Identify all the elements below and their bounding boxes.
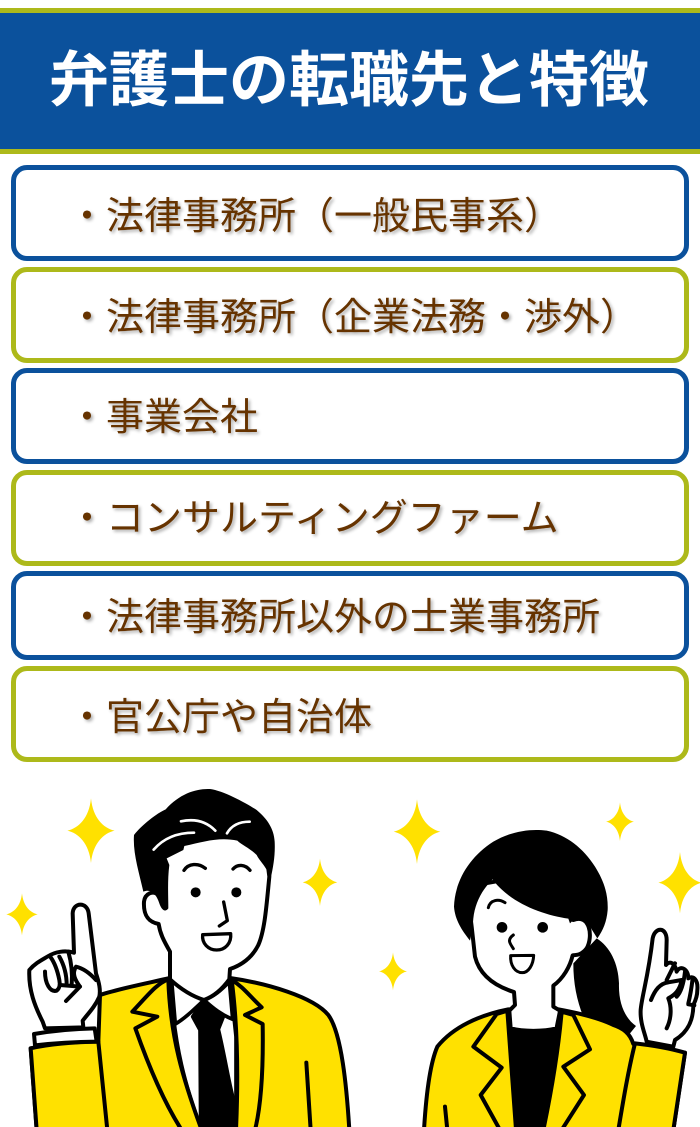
- woman ponytail: [573, 938, 636, 1033]
- man lapels: [132, 979, 263, 1127]
- man pointing hand: [29, 905, 100, 1028]
- title banner: [0, 8, 700, 154]
- woman with sparkles: [379, 799, 700, 1127]
- man head: [144, 830, 269, 1000]
- list item 2: [11, 267, 689, 363]
- man hair highlights: [154, 820, 250, 850]
- woman inner top: [510, 1027, 562, 1127]
- list item 3: [11, 368, 689, 464]
- title: 弁護士の転職先と特徴: [49, 47, 649, 114]
- man face: [184, 865, 250, 950]
- sparkles right: [379, 799, 700, 990]
- list item 2: ・法律事務所（企業法務・渉外）: [68, 297, 638, 339]
- list item 6: [11, 666, 689, 762]
- woman head and neck: [467, 870, 590, 1031]
- list item 5: ・法律事務所以外の士業事務所: [68, 596, 600, 638]
- list item 6: ・官公庁や自治体: [68, 697, 372, 739]
- list item 1: [11, 165, 689, 261]
- list item 4: [11, 470, 689, 566]
- woman lapels: [473, 1011, 590, 1127]
- list item 4: ・コンサルティングファーム: [68, 498, 559, 540]
- list item 1: ・法律事務所（一般民事系）: [68, 196, 562, 238]
- man with sparkles: [6, 789, 349, 1127]
- list item 5: [11, 571, 689, 660]
- woman pointing hand: [641, 930, 697, 1047]
- man shirt and tie: [171, 979, 236, 1127]
- woman jacket: [424, 1009, 685, 1127]
- woman hair: [454, 830, 608, 941]
- woman face: [488, 900, 548, 973]
- sparkles left: [6, 798, 337, 935]
- man jacket: [31, 978, 349, 1127]
- list item 3: ・事業会社: [68, 397, 258, 439]
- man hair: [134, 789, 275, 910]
